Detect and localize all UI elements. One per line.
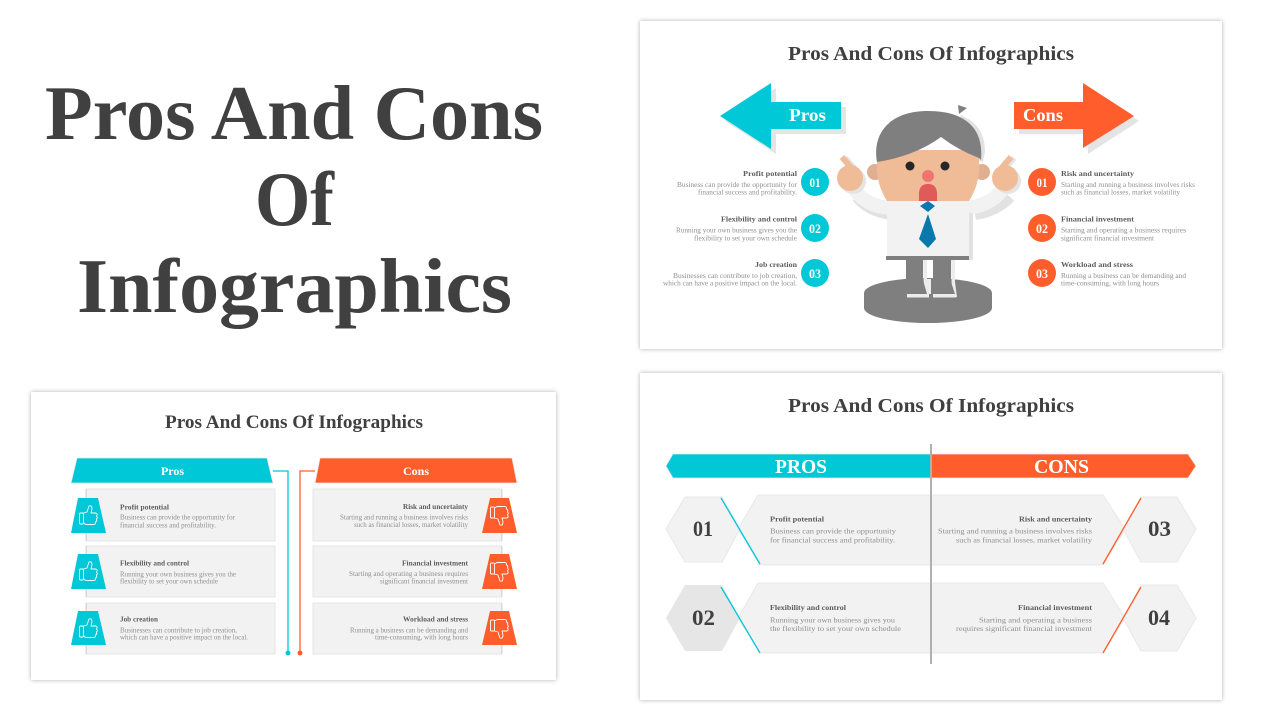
cons card 1: Starting and running a business involves risks [340,512,468,522]
main title: Pros And Cons [45,70,543,156]
pros card 3: Job creation [120,614,159,624]
pro item 3: Businesses can contribute to job creation, [673,271,797,280]
cons card 1: Risk and uncertainty [403,502,468,511]
row: cons 03: Starting and running a business involves risks [938,526,1092,536]
row: cons 04 [931,583,1196,653]
slide 2 heading: Pros And Cons Of Infographics [165,413,423,433]
banner: cons [931,454,1196,478]
con item 2: Starting and operating a business requires [1061,226,1186,234]
panel: slide with hexagon rows [640,373,1222,700]
row: pros 01: for financial success and profitability. [770,536,895,544]
pro item 1: 01 [810,175,820,190]
con item 3: Running a business can be demanding and [1061,271,1186,280]
row: pros 02: 02 [692,605,715,630]
pro item 1: Business can provide the opportunity for [677,180,797,189]
cons card 3: Running a business can be demanding and [350,626,468,634]
pros card 3 [71,603,275,654]
pros card 3: which can have a positive impact on the local. [120,632,248,642]
slide 1 heading: Pros And Cons Of Infographics [788,43,1074,65]
pros card 3: Businesses can contribute to job creation, [120,626,237,634]
row: pros 02: the flexibility to set your own schedule [770,624,902,633]
cons card 2 [313,546,517,597]
illustration: surprised businessman on a pedestal [837,105,1021,323]
row: pros 01: Profit potential [770,514,825,524]
pros header: Pros [161,464,184,478]
arrow: cons: Cons [1023,105,1063,125]
pros card 1: Profit potential [120,502,170,512]
cons card 2: significant financial investment [380,576,469,586]
row: pros 01: Business can provide the opportunity [770,526,896,536]
con item 2: 02 [1036,221,1048,236]
con item 2: significant financial investment [1061,234,1155,242]
cons card 1: such as financial losses, market volatility [354,520,468,529]
head [867,105,990,201]
row: pros 02: Running your own business gives you [770,616,895,624]
cons header: Cons [403,464,429,478]
cons card 2: Financial investment [402,558,468,568]
cons card 3 [313,603,517,654]
pro item 3: which can have a positive impact on the local. [663,278,797,288]
main title: Infographics [77,243,512,329]
icon: thumbs up [71,554,106,589]
icon: thumbs down [482,498,517,533]
pros header [71,458,273,483]
con item 2: Financial investment [1061,214,1134,224]
row: pros 01 [666,495,931,565]
con item 2 [1028,214,1186,242]
connector: cons [298,471,315,656]
pro item 1: Profit potential [743,169,798,178]
row: cons 03: Risk and uncertainty [1019,514,1092,524]
con item 3 [1028,259,1186,288]
con item 3: 03 [1036,266,1048,281]
cons card 2: Starting and operating a business requires [349,569,468,578]
row: cons 04: requires significant financial investment [956,624,1093,633]
pros card 1: financial success and profitability. [120,520,216,530]
cons card 3: Workload and stress [403,614,468,624]
pro item 2: 02 [809,221,821,236]
pro item 2 [676,214,829,242]
center divider [930,444,932,664]
cons list [1028,168,1195,288]
pros card 2: Flexibility and control [120,558,190,568]
con item 1: 01 [1036,175,1048,190]
pro item 2: Running your own business gives you the [676,226,797,234]
necktie [919,201,936,248]
arms [855,190,1009,213]
cons card 1 [313,489,517,541]
pros card 2: Running your own business gives you the [120,570,236,578]
pro item 2: Flexibility and control [721,214,798,224]
pro item 3: 03 [809,266,821,281]
con item 1: Starting and running a business involves risks [1061,180,1195,189]
main title [45,70,543,329]
main title: Of [255,156,335,242]
row: cons 03: 03 [1148,516,1171,541]
slide 3 heading: Pros And Cons Of Infographics [788,395,1074,417]
panel: slide with two card columns [31,392,556,680]
icon: thumbs up [71,498,106,533]
row: pros 02 [666,583,931,653]
panel: slide with character and arrows [640,21,1222,349]
con item 1: such as financial losses, market volatility [1061,188,1180,196]
con item 3: time-consuming, with long hours [1061,278,1159,288]
connector: pros [273,471,290,656]
pro item 1: financial success and profitability. [698,188,797,196]
icon: thumbs down [482,554,517,589]
row: cons 04: Financial investment [1018,603,1092,612]
arrow: cons [1014,83,1139,154]
pro item 3: Job creation [755,260,798,269]
pros card 1: Business can provide the opportunity for [120,512,235,522]
row: cons 04: 04 [1148,605,1170,630]
legs [906,258,957,298]
banner: pros [666,454,931,478]
pros card 2 [71,546,275,597]
pedestal [864,278,992,323]
con item 1 [1028,168,1195,196]
hands [837,157,1021,194]
arrow: pros: Pros [789,105,826,125]
pro item 1 [677,168,829,196]
cons header [315,458,517,483]
con item 1: Risk and uncertainty [1061,169,1134,178]
row: cons 03 [931,495,1196,565]
con item 3: Workload and stress [1061,260,1133,269]
banner: cons: CONS [1034,456,1089,478]
row: cons 04: Starting and operating a business [979,616,1092,624]
banner: pros: PROS [775,456,827,478]
pro item 2: flexibility to set your own schedule [694,234,798,242]
torso [886,201,973,260]
arrow: pros [720,83,846,154]
icon: thumbs down [482,611,517,645]
row: cons 03: such as financial losses, market volatility [956,536,1092,544]
row: pros 02: Flexibility and control [770,603,847,612]
cons card 3: time-consuming, with long hours [375,632,468,642]
pros list [663,168,829,288]
icon: thumbs up [71,611,106,645]
pros card 1 [71,489,275,541]
pro item 3 [663,259,829,288]
pros card 2: flexibility to set your own schedule [120,576,218,586]
row: pros 01: 01 [693,516,713,541]
